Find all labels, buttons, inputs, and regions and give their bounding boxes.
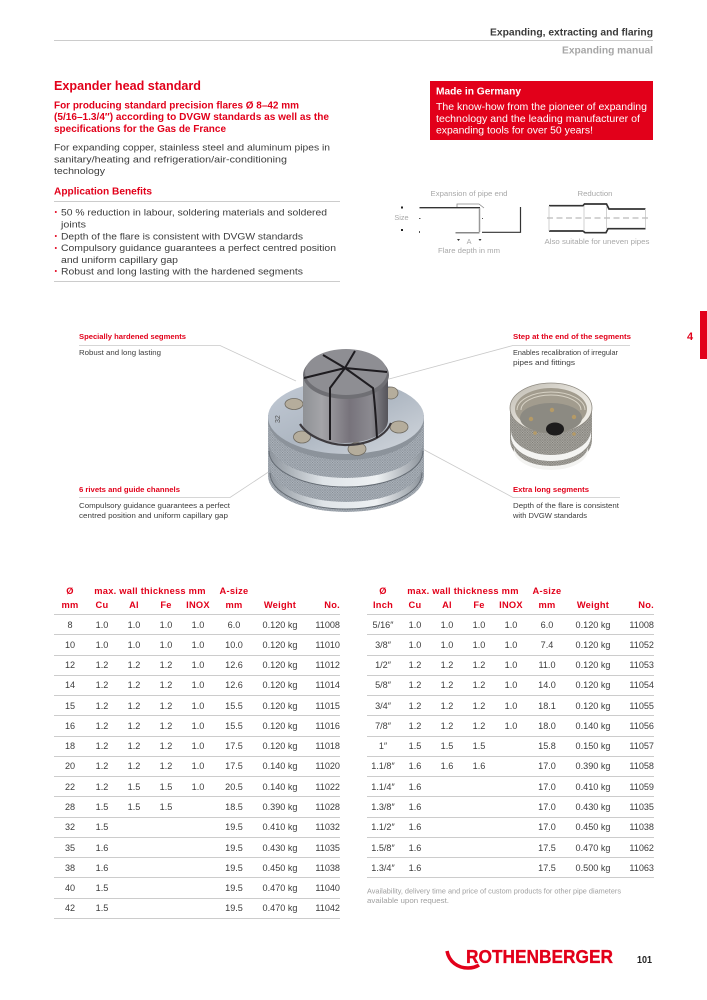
table: sizes in inches: 0.410 kg: [576, 782, 610, 792]
table: sizes in inches: 17.0: [538, 802, 556, 812]
table: sizes in inches: 0.470 kg: [576, 843, 610, 853]
callout: specially hardened segments: Robust and long lasting: [79, 348, 161, 357]
table: sizes in millimetres: 38: [65, 863, 75, 873]
table: sizes in millimetres: 11015: [315, 701, 340, 711]
table: sizes in millimetres: 1.5: [160, 782, 172, 792]
table: sizes in millimetres: 19.5: [225, 822, 243, 832]
footnote: available upon request.: [367, 896, 449, 905]
table: sizes in millimetres: 17.5: [225, 761, 243, 771]
table: sizes in inches: Al: [442, 600, 452, 610]
table: sizes in inches: 0.390 kg: [576, 761, 610, 771]
table: sizes in inches: 17.0: [538, 822, 556, 832]
table: sizes in inches: Cu: [409, 600, 421, 610]
table: sizes in inches: 11063: [629, 863, 654, 873]
callout: 6 rivets and guide channels: 6 rivets and guide channels: [79, 485, 180, 494]
table: sizes in inches: 14.0: [538, 680, 556, 690]
table: sizes in inches: [367, 586, 654, 878]
table: sizes in millimetres: 1.5: [96, 802, 108, 812]
table: sizes in millimetres: 0.140 kg: [263, 782, 297, 792]
table: sizes in millimetres: 1.2: [96, 741, 108, 751]
table: sizes in millimetres: 1.2: [96, 761, 108, 771]
table: sizes in inches: 6.0: [541, 620, 553, 630]
heading: Application Benefits: Application Benefits: [54, 186, 153, 198]
table: sizes in millimetres: 1.5: [160, 802, 172, 812]
table: sizes in millimetres: 1.5: [128, 802, 140, 812]
table: sizes in millimetres: 1.2: [128, 660, 140, 670]
product photo: expander head: [268, 349, 424, 512]
callout box: Made in Germany: The know-how from the pioneer of expanding: [436, 102, 647, 113]
page header: chapter title: Expanding, extracting and flaring: [490, 28, 653, 38]
table: sizes in inches: Ø: [379, 586, 387, 596]
table: sizes in millimetres: 1.2: [128, 680, 140, 690]
table: sizes in millimetres: 1.0: [192, 761, 204, 771]
table: sizes in millimetres: 1.2: [128, 701, 140, 711]
table: sizes in millimetres: 1.0: [192, 680, 204, 690]
subtitle: specifications for the Gas de France: [54, 124, 227, 135]
table: sizes in inches: 11008: [629, 620, 654, 630]
callout leader lines: [79, 346, 630, 498]
table: sizes in millimetres: 1.0: [160, 640, 172, 650]
table: sizes in inches: 1.2: [409, 660, 421, 670]
table: sizes in inches: 1″: [379, 741, 387, 751]
table: sizes in inches: 11.0: [538, 660, 556, 670]
table: sizes in millimetres: 28: [65, 802, 75, 812]
callout: extra long segments: Depth of the flare is consistent: [513, 501, 619, 510]
table: sizes in millimetres: 11014: [315, 680, 340, 690]
callout box: Made in Germany: technology and the leading manufacturer of: [436, 114, 640, 125]
segment slits: [304, 351, 387, 440]
table: sizes in millimetres: 8: [67, 620, 73, 630]
callout: extra long segments: Extra long segments: [513, 485, 589, 494]
description text: For expanding copper, stainless steel and aluminum pipes in: [54, 142, 330, 154]
table: sizes in millimetres: 0.390 kg: [263, 802, 297, 812]
table: sizes in millimetres: 6.0: [228, 620, 240, 630]
callout: step at the end of the segments: [513, 332, 631, 367]
table: sizes in inches: 1.2: [441, 680, 453, 690]
table: sizes in inches: 5/16″: [373, 620, 393, 630]
table: sizes in millimetres: 17.5: [225, 741, 243, 751]
table: sizes in millimetres: 0.450 kg: [263, 863, 297, 873]
table: sizes in millimetres: 11012: [315, 660, 340, 670]
table: sizes in millimetres: 1.0: [192, 660, 204, 670]
table: sizes in inches: 1.2: [441, 660, 453, 670]
table: sizes in inches: 1.6: [409, 822, 421, 832]
table: sizes in millimetres: 1.5: [96, 822, 108, 832]
table: sizes in millimetres: 0.430 kg: [263, 843, 297, 853]
chapter tab: 4: [687, 331, 694, 343]
table: sizes in millimetres: A-size: [220, 586, 248, 596]
table: sizes in millimetres: 1.2: [128, 761, 140, 771]
table: sizes in inches: 0.500 kg: [576, 863, 610, 873]
table: sizes in inches: 1.0: [441, 640, 453, 650]
table: sizes in millimetres: 20.5: [225, 782, 243, 792]
segmented mandrel: [303, 378, 388, 443]
benefits list: 50 % reduction in labour, soldering materials and soldered: [61, 208, 327, 218]
benefits list: Compulsory guidance guarantees a perfect centred position: [61, 243, 336, 254]
table: sizes in inches: 1.6: [441, 761, 453, 771]
table: sizes in millimetres: 40: [65, 883, 75, 893]
table: sizes in millimetres: 11018: [315, 741, 340, 751]
table: sizes in inches: 18.0: [538, 721, 556, 731]
table: sizes in inches: 1.2: [441, 721, 453, 731]
callout: specially hardened segments: Specially hardened segments: [79, 332, 186, 341]
table: sizes in millimetres: Cu: [96, 600, 108, 610]
table: sizes in inches: 3/4″: [375, 701, 391, 711]
table: sizes in millimetres: 1.5: [128, 782, 140, 792]
table: sizes in millimetres: 1.5: [96, 903, 108, 913]
table: sizes in inches: 1.0: [473, 620, 485, 630]
table: sizes in millimetres: 15.5: [225, 701, 243, 711]
table: sizes in millimetres: 12.6: [225, 680, 243, 690]
table: sizes in inches: 1.2: [409, 680, 421, 690]
page header: chapter title: [54, 28, 653, 56]
table: sizes in millimetres: 1.6: [96, 863, 108, 873]
table: sizes in inches: 0.120 kg: [576, 660, 610, 670]
table: sizes in millimetres: 1.0: [96, 620, 108, 630]
table: sizes in inches: A-size: [533, 586, 561, 596]
table: sizes in millimetres: 11028: [315, 802, 340, 812]
table: sizes in inches: 0.430 kg: [576, 802, 610, 812]
table: sizes in inches: 17.5: [538, 843, 556, 853]
table: sizes in inches: 0.140 kg: [576, 721, 610, 731]
table: sizes in millimetres: Al: [129, 600, 139, 610]
table: sizes in inches: 1.0: [505, 680, 517, 690]
table: sizes in millimetres: 0.410 kg: [263, 822, 297, 832]
heading: Expander head standard: Expander head standard: [54, 78, 201, 93]
table: sizes in millimetres: mm: [61, 600, 79, 610]
table: sizes in inches: 1.2: [409, 721, 421, 731]
table: sizes in inches: 1.0: [505, 620, 517, 630]
table: sizes in inches: 11062: [629, 843, 654, 853]
callout: step at the end of the segments: Step at the end of the segments: [513, 332, 631, 341]
table: sizes in millimetres: 11035: [315, 843, 340, 853]
table: sizes in millimetres: 19.5: [225, 843, 243, 853]
table: sizes in millimetres: 1.0: [192, 741, 204, 751]
table: sizes in millimetres: 11022: [315, 782, 340, 792]
table: sizes in millimetres: 1.2: [160, 701, 172, 711]
table: sizes in millimetres: Fe: [160, 600, 172, 610]
table: sizes in millimetres: No.: [324, 600, 340, 610]
table: sizes in millimetres: 18.5: [225, 802, 243, 812]
table: sizes in inches: 1.1/8″: [371, 761, 395, 771]
table: sizes in inches: 1.1/4″: [371, 782, 395, 792]
callout: extra long segments: [512, 485, 619, 520]
table: sizes in millimetres: max. wall thickness mm: [94, 586, 206, 596]
table: sizes in inches: 11057: [629, 741, 654, 751]
table: sizes in millimetres: 22: [65, 782, 75, 792]
table: sizes in inches: 0.150 kg: [576, 741, 610, 751]
table: sizes in inches: 5/8″: [375, 680, 391, 690]
table: sizes in inches: mm: [538, 600, 556, 610]
table: sizes in millimetres: Ø: [66, 586, 74, 596]
callout: specially hardened segments: [79, 332, 186, 357]
table: sizes in inches: 17.0: [538, 782, 556, 792]
benefits list: [54, 208, 340, 282]
table: sizes in inches: 1.0: [505, 701, 517, 711]
rivets: [285, 387, 408, 456]
table: sizes in millimetres: 11016: [315, 721, 340, 731]
callout box: Made in Germany: [430, 81, 653, 140]
footnote: Availability, delivery time and price of custom products for other pipe diameters: [367, 886, 621, 896]
table: sizes in inches: 1.2: [473, 680, 485, 690]
callout box: Made in Germany: Made in Germany: [436, 86, 522, 98]
description text: sanitary/heating and refrigeration/air-conditioning: [54, 154, 287, 165]
table: sizes in millimetres: 11040: [315, 883, 340, 893]
table: sizes in millimetres: 0.120 kg: [263, 701, 297, 711]
table: sizes in millimetres: 1.0: [192, 640, 204, 650]
callout: step at the end of the segments: pipes and fittings: [513, 358, 575, 367]
product photo: expander head: 32: [275, 415, 282, 423]
table: sizes in millimetres: 1.0: [96, 640, 108, 650]
description text: [54, 142, 330, 177]
callout: step at the end of the segments: Enables recalibration of irregular: [513, 348, 619, 357]
table: sizes in inches: 11054: [629, 680, 654, 690]
table: sizes in millimetres: 1.2: [128, 721, 140, 731]
table: sizes in millimetres: 0.140 kg: [263, 761, 297, 771]
callout: 6 rivets and guide channels: Compulsory guidance guarantees a perfect: [79, 501, 230, 510]
table: sizes in millimetres: 12.6: [225, 660, 243, 670]
Rothenberger logo: ROTHENBERGER: [466, 947, 613, 967]
table: sizes in millimetres: 1.2: [160, 721, 172, 731]
table: sizes in inches: 0.120 kg: [576, 680, 610, 690]
description text: technology: [54, 166, 105, 177]
table: sizes in millimetres: 1.2: [160, 660, 172, 670]
table: sizes in inches: 15.8: [538, 741, 556, 751]
table: sizes in millimetres: 42: [65, 903, 75, 913]
table: sizes in inches: 1/2″: [375, 660, 391, 670]
table: sizes in inches: 1.0: [409, 640, 421, 650]
table: sizes in inches: 0.120 kg: [576, 640, 610, 650]
diagram: reduction: Also suitable for uneven pipes: [544, 237, 650, 246]
page number: 101: [637, 955, 652, 966]
table: sizes in inches: 11058: [629, 761, 654, 771]
table: sizes in inches: 1.2: [473, 660, 485, 670]
table: sizes in millimetres: 1.0: [192, 721, 204, 731]
chapter tab: [687, 311, 707, 359]
table: sizes in millimetres: 0.120 kg: [263, 741, 297, 751]
table: sizes in inches: 11053: [629, 660, 654, 670]
table: sizes in inches: 1.6: [409, 802, 421, 812]
table: sizes in millimetres: 1.2: [96, 660, 108, 670]
table: sizes in millimetres: 11042: [315, 903, 340, 913]
table: sizes in millimetres: 0.470 kg: [263, 903, 297, 913]
table: sizes in millimetres: 0.120 kg: [263, 660, 297, 670]
subtitle: [54, 100, 330, 135]
table: sizes in inches: 7/8″: [375, 721, 391, 731]
product photo: expander head inside view: [510, 383, 592, 470]
table: sizes in inches: 1.6: [409, 761, 421, 771]
table: sizes in millimetres: 11008: [315, 620, 340, 630]
table: sizes in inches: 1.0: [441, 620, 453, 630]
table: sizes in millimetres: 14: [65, 680, 75, 690]
benefits list: and uniform capillary gap: [61, 255, 178, 266]
table: sizes in millimetres: Weight: [264, 600, 296, 610]
table: sizes in inches: Fe: [473, 600, 485, 610]
benefits list: Robust and long lasting with the hardened segments: [61, 267, 303, 278]
table: sizes in millimetres: 1.2: [96, 721, 108, 731]
table: sizes in millimetres: 32: [65, 822, 75, 832]
table: sizes in millimetres: 1.2: [128, 741, 140, 751]
table: sizes in inches: 11038: [629, 822, 654, 832]
subtitle: For producing standard precision flares Ø 8–42 mm: [54, 100, 299, 112]
table: sizes in inches: 1.2: [473, 701, 485, 711]
table: sizes in inches: 1.0: [505, 660, 517, 670]
table: sizes in millimetres: 1.0: [192, 620, 204, 630]
table: sizes in inches: 17.0: [538, 761, 556, 771]
diagram: reduction: [544, 189, 650, 246]
table: sizes in millimetres: 0.120 kg: [263, 721, 297, 731]
table: sizes in millimetres: 1.2: [96, 680, 108, 690]
callout: 6 rivets and guide channels: [79, 485, 230, 520]
callout box: Made in Germany: expanding tools for over 50 years!: [436, 126, 593, 136]
table: sizes in inches: 7.4: [541, 640, 553, 650]
table: sizes in inches: 0.120 kg: [576, 620, 610, 630]
table: sizes in inches: 11035: [629, 802, 654, 812]
table: sizes in inches: No.: [638, 600, 654, 610]
table: sizes in inches: 1.0: [505, 721, 517, 731]
table: sizes in inches: 11052: [629, 640, 654, 650]
table: sizes in inches: 1.6: [473, 761, 485, 771]
table: sizes in inches: 11055: [629, 701, 654, 711]
table: sizes in millimetres: 1.0: [128, 640, 140, 650]
page header: chapter title: Expanding manual: [562, 46, 653, 56]
diagram: expansion of pipe end: [394, 189, 520, 255]
table: sizes in inches: 11059: [629, 782, 654, 792]
table: sizes in millimetres: 10: [65, 640, 75, 650]
table: sizes in millimetres: 19.5: [225, 863, 243, 873]
table: sizes in millimetres: 11020: [315, 761, 340, 771]
table: sizes in inches: 1.5: [473, 741, 485, 751]
table: sizes in millimetres: 15: [65, 701, 75, 711]
table: sizes in inches: 0.120 kg: [576, 701, 610, 711]
diagram: expansion of pipe end: Size: [394, 213, 409, 222]
table: sizes in inches: 1.2: [473, 721, 485, 731]
table: sizes in millimetres: 20: [65, 761, 75, 771]
table: sizes in millimetres: 10.0: [225, 640, 243, 650]
diagram: expansion of pipe end: Flare depth in mm: [438, 246, 500, 255]
table: sizes in millimetres: 1.0: [192, 782, 204, 792]
table: sizes in millimetres: 19.5: [225, 903, 243, 913]
table: sizes in millimetres: 19.5: [225, 883, 243, 893]
table: sizes in millimetres: 1.0: [192, 701, 204, 711]
table: sizes in inches: Weight: [577, 600, 609, 610]
table: sizes in millimetres: 1.2: [160, 761, 172, 771]
table: sizes in inches: 11056: [629, 721, 654, 731]
table: sizes in inches: 1.0: [409, 620, 421, 630]
callout: 6 rivets and guide channels: centred position and uniform capillary gap: [79, 511, 228, 520]
table: sizes in inches: 1.5/8″: [371, 843, 395, 853]
table: sizes in millimetres: 0.120 kg: [263, 620, 297, 630]
table: sizes in millimetres: 11038: [315, 863, 340, 873]
table: sizes in inches: 1.1/2″: [371, 822, 395, 832]
table: sizes in millimetres: 12: [65, 660, 75, 670]
table: sizes in millimetres: 35: [65, 843, 75, 853]
table: sizes in millimetres: 1.6: [96, 843, 108, 853]
table: sizes in inches: 1.3/4″: [371, 863, 395, 873]
table: sizes in millimetres: 11032: [315, 822, 340, 832]
table: sizes in millimetres: [54, 586, 340, 919]
table: sizes in millimetres: 0.120 kg: [263, 680, 297, 690]
subtitle: (5/16–1.3/4″) according to DVGW standards as well as the: [54, 112, 330, 123]
table: sizes in millimetres: 1.2: [160, 680, 172, 690]
table: sizes in inches: Inch: [373, 600, 393, 610]
table: sizes in millimetres: 15.5: [225, 721, 243, 731]
footnote: [367, 886, 621, 905]
table: sizes in inches: 1.0: [473, 640, 485, 650]
table: sizes in inches: 18.1: [538, 701, 556, 711]
table: sizes in millimetres: 1.0: [128, 620, 140, 630]
table: sizes in millimetres: 1.2: [160, 741, 172, 751]
table: sizes in millimetres: 0.120 kg: [263, 640, 297, 650]
table: sizes in inches: 1.6: [409, 843, 421, 853]
benefits list: Depth of the flare is consistent with DVGW standards: [61, 231, 303, 242]
table: sizes in inches: 1.2: [441, 701, 453, 711]
table: sizes in inches: max. wall thickness mm: [407, 586, 519, 596]
table: sizes in millimetres: 16: [65, 721, 75, 731]
table: sizes in inches: 1.2: [409, 701, 421, 711]
table: sizes in millimetres: INOX: [186, 600, 210, 610]
table: sizes in millimetres: 18: [65, 741, 75, 751]
table: sizes in millimetres: 11010: [315, 640, 340, 650]
table: sizes in inches: 3/8″: [375, 640, 391, 650]
table: sizes in millimetres: 0.470 kg: [263, 883, 297, 893]
diagram: expansion of pipe end: A: [467, 237, 472, 246]
diagram: expansion of pipe end: Expansion of pipe end: [430, 189, 508, 198]
callout: extra long segments: with DVGW standards: [512, 511, 587, 520]
table: sizes in millimetres: 1.2: [96, 782, 108, 792]
table: sizes in inches: INOX: [499, 600, 523, 610]
table: sizes in inches: 1.6: [409, 782, 421, 792]
table: sizes in millimetres: 1.2: [96, 701, 108, 711]
table: sizes in millimetres: 1.5: [96, 883, 108, 893]
table: sizes in inches: 17.5: [538, 863, 556, 873]
table: sizes in inches: 1.0: [505, 640, 517, 650]
table: sizes in inches: 1.5: [441, 741, 453, 751]
table: sizes in inches: 1.6: [409, 863, 421, 873]
table: sizes in millimetres: mm: [225, 600, 243, 610]
table: sizes in millimetres: 1.0: [160, 620, 172, 630]
table: sizes in inches: 1.3/8″: [371, 802, 395, 812]
benefits list: joints: [60, 219, 86, 230]
table: sizes in inches: 0.450 kg: [576, 822, 610, 832]
base knurled cylinder: [268, 415, 424, 512]
diagram: reduction: Reduction: [578, 189, 612, 198]
table: sizes in inches: 1.5: [409, 741, 421, 751]
